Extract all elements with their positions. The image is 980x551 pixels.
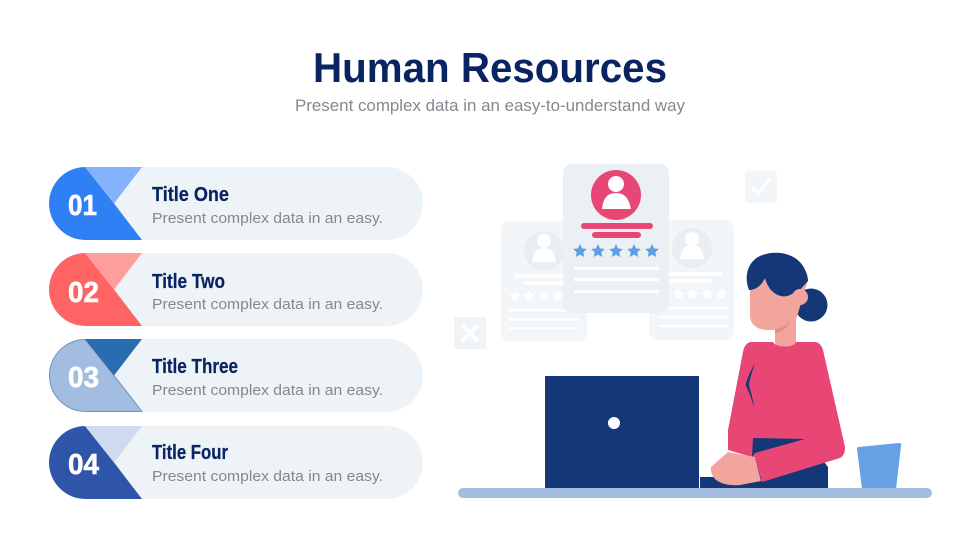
panel: item 01	[49, 167, 423, 240]
panel: item 02: 02	[68, 277, 99, 309]
trousers	[700, 438, 828, 489]
arm gap	[752, 438, 805, 457]
panel: item 04	[49, 426, 423, 499]
icon: cross box	[454, 317, 486, 349]
panel: item 04: Present complex data in an easy.	[152, 468, 383, 485]
hand	[711, 452, 761, 485]
face	[750, 270, 808, 330]
hair	[747, 253, 808, 296]
icon: right profile card	[649, 220, 734, 340]
panel: item 02	[49, 253, 423, 326]
illustration: desk	[458, 488, 932, 498]
sweater fold	[746, 363, 755, 408]
illustration: woman at laptop	[700, 253, 845, 489]
panel: item 02: Title Two	[152, 271, 225, 293]
illustration: laptop	[545, 376, 699, 490]
panel: item 04: 04	[68, 449, 99, 481]
icon: main profile card	[563, 164, 669, 313]
panel: item 03: Present complex data in an easy.	[152, 382, 383, 399]
illustration: cup	[857, 443, 901, 489]
panel: item 04: Title Four	[152, 442, 228, 464]
panel: item 02: Present complex data in an easy.	[152, 296, 383, 313]
panel: item 01: Title One	[152, 184, 229, 206]
panel: item 03	[49, 339, 423, 412]
neck	[775, 320, 796, 347]
icon: left profile card	[501, 221, 587, 341]
title: Human Resources	[313, 44, 667, 91]
panel: item 03: Title Three	[152, 356, 238, 378]
panel: item 01: 01	[68, 190, 97, 222]
panel: item 03: 03	[68, 362, 99, 394]
icon: check box	[745, 171, 777, 203]
panel: item 01: Present complex data in an easy.	[152, 210, 383, 227]
ear	[792, 289, 808, 305]
subtitle: Present complex data in an easy-to-understand way	[295, 96, 685, 115]
bun	[794, 288, 828, 322]
sweater	[728, 342, 845, 482]
